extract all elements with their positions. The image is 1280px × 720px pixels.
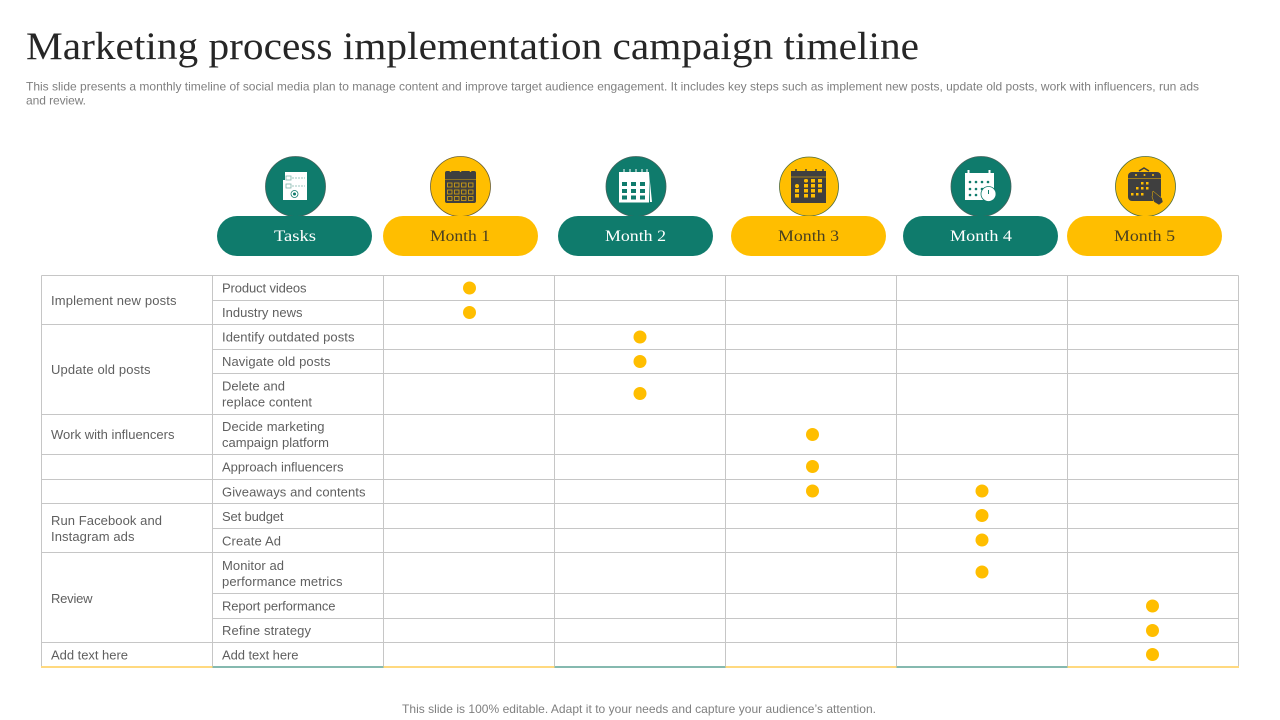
task labels: Refine strategy bbox=[222, 623, 312, 638]
pill: Month 5: Month 5 bbox=[1114, 228, 1175, 245]
category labels: Work with influencers bbox=[51, 427, 175, 442]
pill: Month 2 bbox=[558, 216, 713, 256]
task labels: performance metrics bbox=[222, 574, 343, 589]
pill: Tasks bbox=[217, 216, 372, 256]
category labels bbox=[51, 293, 177, 662]
pill: Month 5 bbox=[1067, 216, 1222, 256]
icon: calendar with clock bbox=[951, 156, 1011, 216]
header: Month 4 bbox=[903, 156, 1058, 256]
category labels: Instagram ads bbox=[51, 529, 135, 544]
header: Tasks bbox=[217, 156, 372, 256]
title: Marketing process implementation campaign timeline bbox=[26, 25, 919, 68]
header: Month 2 bbox=[558, 156, 713, 256]
task labels: Set budget bbox=[222, 509, 284, 524]
timeline markers bbox=[463, 282, 1159, 661]
task labels: Add text here bbox=[222, 648, 298, 662]
task labels: campaign platform bbox=[222, 435, 329, 450]
task labels bbox=[222, 280, 366, 662]
task labels: Identify outdated posts bbox=[222, 330, 355, 344]
task labels: Create Ad bbox=[222, 534, 281, 548]
category labels: Run Facebook and bbox=[51, 513, 162, 528]
task labels: Report performance bbox=[222, 598, 336, 614]
category labels: Implement new posts bbox=[51, 293, 177, 308]
pill: Month 1 bbox=[383, 216, 538, 256]
pill: Tasks: Tasks bbox=[274, 228, 316, 245]
task labels: Delete and bbox=[222, 378, 285, 394]
icon: calendar with hand pointer bbox=[1116, 156, 1176, 216]
header: Month 3 bbox=[731, 157, 886, 256]
header: Month 1 bbox=[383, 156, 538, 256]
category labels: Add text here bbox=[51, 648, 128, 662]
header: Month 5 bbox=[1067, 156, 1222, 256]
icon: task document bbox=[266, 156, 326, 216]
task labels: Navigate old posts bbox=[222, 354, 331, 369]
table grid bbox=[42, 276, 1238, 667]
task labels: replace content bbox=[222, 394, 312, 410]
subtitle text: This slide presents a monthly timeline of social media plan to manage content and improve target audience engagement. It includes key steps such as implement new posts, update old posts, work with influencers, run ads bbox=[26, 80, 1199, 94]
icon: wall calendar bbox=[606, 156, 666, 216]
subtitle text bbox=[26, 80, 1199, 108]
pill: Month 1: Month 1 bbox=[430, 228, 490, 245]
pill: Month 2: Month 2 bbox=[605, 228, 666, 245]
task labels: Giveaways and contents bbox=[222, 484, 366, 500]
pill: Month 4 bbox=[903, 216, 1058, 256]
task labels: Product videos bbox=[222, 280, 307, 296]
task labels: Industry news bbox=[222, 305, 303, 320]
task labels: Decide marketing bbox=[222, 419, 324, 434]
pill: Month 4: Month 4 bbox=[950, 228, 1012, 245]
subtitle text: and review. bbox=[26, 94, 86, 108]
table bottom border bbox=[41, 666, 1239, 668]
category labels: Review bbox=[51, 591, 93, 606]
pill: Month 3 bbox=[731, 216, 886, 256]
icon: calendar with check bbox=[430, 156, 490, 216]
task labels: Monitor ad bbox=[222, 558, 284, 573]
icon: monthly grid calendar bbox=[780, 157, 838, 216]
pill: Month 3: Month 3 bbox=[778, 228, 839, 245]
timeline table bbox=[41, 276, 1239, 667]
footer note: This slide is 100% editable. Adapt it to your needs and capture your audience’s attention. bbox=[402, 702, 876, 716]
task labels: Approach influencers bbox=[222, 460, 344, 474]
category labels: Update old posts bbox=[51, 362, 151, 377]
